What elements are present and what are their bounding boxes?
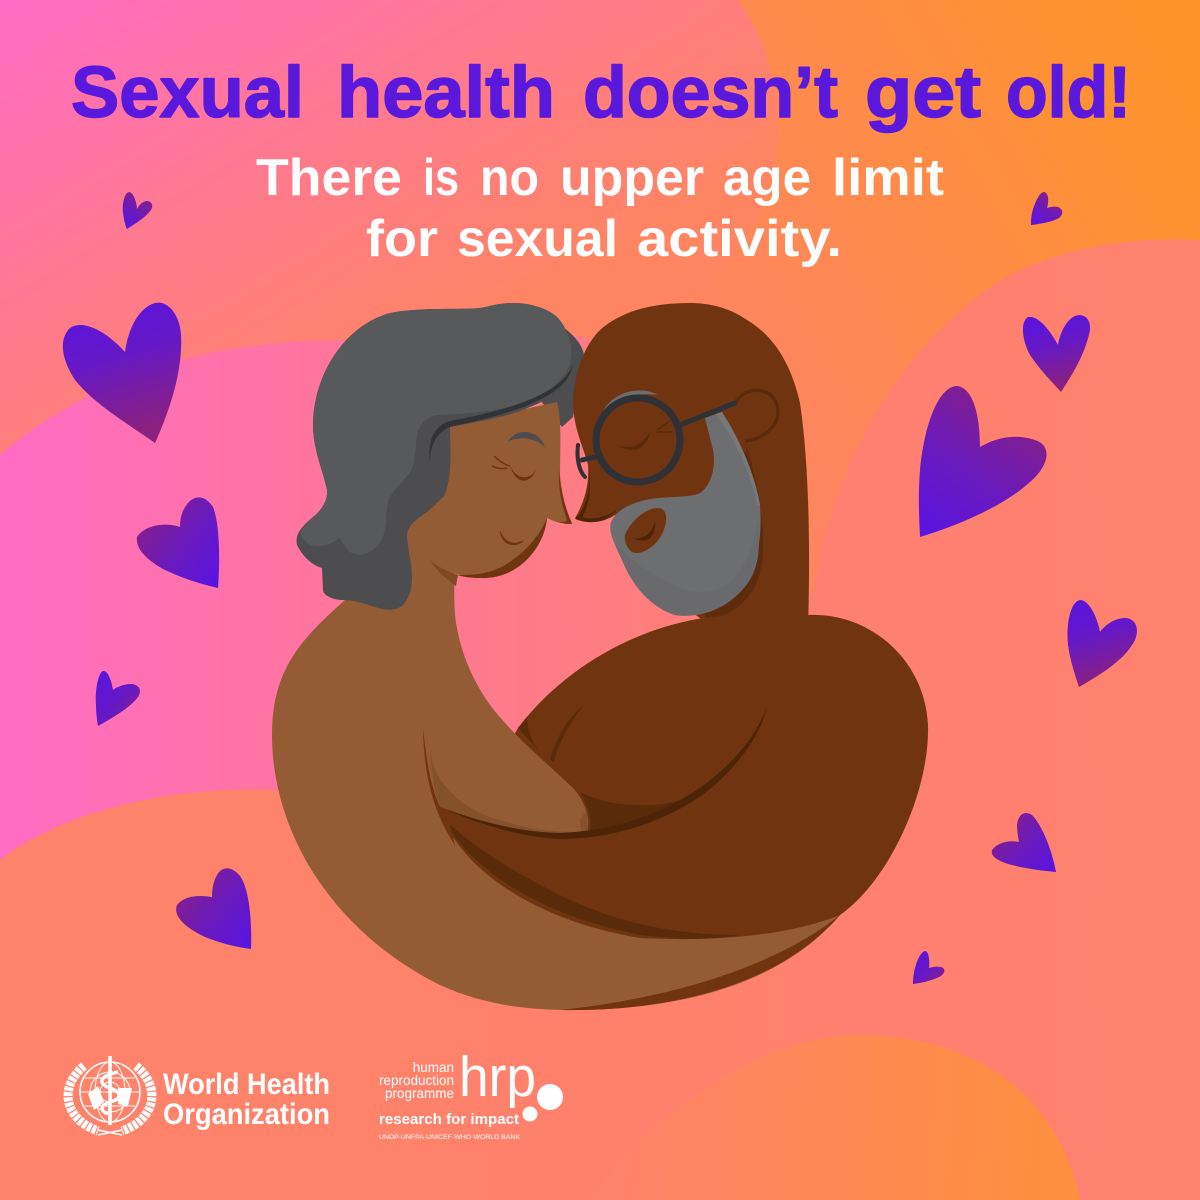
- shadow under woman torso: [560, 915, 840, 1010]
- WHO wordmark: [163, 1068, 330, 1131]
- heart: lower right: [992, 813, 1056, 872]
- title: get: [865, 53, 981, 133]
- WHO emblem: [68, 1056, 152, 1135]
- HRP small dot: [522, 1106, 538, 1122]
- title: health: [337, 53, 555, 133]
- man arm crease band: [443, 818, 740, 939]
- subtitle: upper: [560, 149, 704, 207]
- floating hearts: [63, 192, 1137, 984]
- WHO wordmark: World Health: [163, 1068, 330, 1101]
- dark wedge under hands: [580, 792, 700, 833]
- woman hair highlight: [300, 303, 571, 555]
- man ear outline: [735, 390, 778, 441]
- man eye wrinkles: [656, 421, 672, 432]
- woman eye wrinkles: [492, 456, 510, 469]
- title: old!: [1006, 53, 1131, 133]
- man lip shade: [633, 522, 655, 541]
- man beard: [610, 412, 761, 616]
- woman hair back: [540, 325, 584, 427]
- man mouth: [625, 508, 666, 553]
- HRP large dot: [537, 1084, 563, 1110]
- subtitle: no: [480, 149, 539, 207]
- HRP logo: [379, 1045, 563, 1141]
- man beard shadow: [700, 447, 763, 618]
- HRP letters: hrp: [459, 1045, 536, 1109]
- heart: small bottom right: [913, 951, 944, 984]
- heart: large left: [63, 303, 181, 443]
- HRP programme name: programme: [385, 1086, 454, 1101]
- heart: large right: [919, 386, 1046, 537]
- WHO logo: [68, 1056, 330, 1135]
- man head and neck: [573, 303, 809, 640]
- HRP programme name: human: [413, 1060, 454, 1075]
- woman closed eye: [510, 465, 536, 481]
- subtitle: [256, 149, 944, 268]
- title: Sexual: [71, 53, 304, 133]
- heart: small left: [96, 671, 140, 726]
- HRP programme name: [379, 1060, 454, 1101]
- subtitle: age: [723, 149, 811, 207]
- subtitle: There: [256, 149, 402, 207]
- forearm shading: [430, 747, 580, 835]
- woman neck and forearm: [400, 540, 588, 836]
- woman smile: [500, 531, 523, 545]
- woman face: [407, 402, 572, 577]
- WHO wordmark: Organization: [163, 1098, 330, 1131]
- glasses: [577, 398, 735, 482]
- man nose line: [575, 463, 617, 522]
- subtitle: activity.: [637, 210, 842, 268]
- beard rim: [716, 412, 760, 505]
- background bottom-right orange blob: [590, 1035, 1080, 1200]
- heart: bottom left: [176, 868, 251, 949]
- heart: small top left: [123, 192, 152, 229]
- subtitle: sexual: [457, 210, 618, 268]
- woman hair: [297, 303, 573, 610]
- arm line: [440, 707, 767, 839]
- background top-left blob: [0, 0, 777, 455]
- HRP programme name: reproduction: [379, 1073, 454, 1088]
- woman torso: [272, 520, 840, 1010]
- armpit shadow: [518, 717, 540, 752]
- neck shadow: [430, 560, 458, 586]
- heart: upper right: [1023, 315, 1090, 392]
- subtitle: is: [423, 149, 459, 207]
- embracing couple illustration: [272, 303, 928, 1010]
- shadow edge on woman back: [423, 728, 455, 845]
- man body and arm: [437, 615, 928, 939]
- heart: small top right: [1031, 192, 1062, 225]
- heart: medium left: [137, 497, 219, 588]
- beard lower shade: [616, 520, 759, 616]
- woman hair line: [429, 363, 573, 462]
- HRP sponsors: UNDP·UNFPA·UNICEF·WHO·WORLD BANK: [379, 1134, 521, 1141]
- woman eyebrow: [508, 432, 545, 447]
- background bottom blob: [0, 789, 1200, 1200]
- chin and nose shadow: [457, 470, 572, 578]
- HRP tagline: research for impact: [379, 1111, 519, 1128]
- man chest crease: [550, 706, 583, 762]
- subtitle: limit: [832, 149, 944, 207]
- man eyebrow: [602, 391, 658, 413]
- woman thumb: [580, 813, 588, 834]
- title: doesn’t: [583, 53, 838, 133]
- man closed eye: [617, 432, 650, 450]
- heart: medium right: [1068, 600, 1137, 687]
- subtitle: for: [366, 210, 438, 268]
